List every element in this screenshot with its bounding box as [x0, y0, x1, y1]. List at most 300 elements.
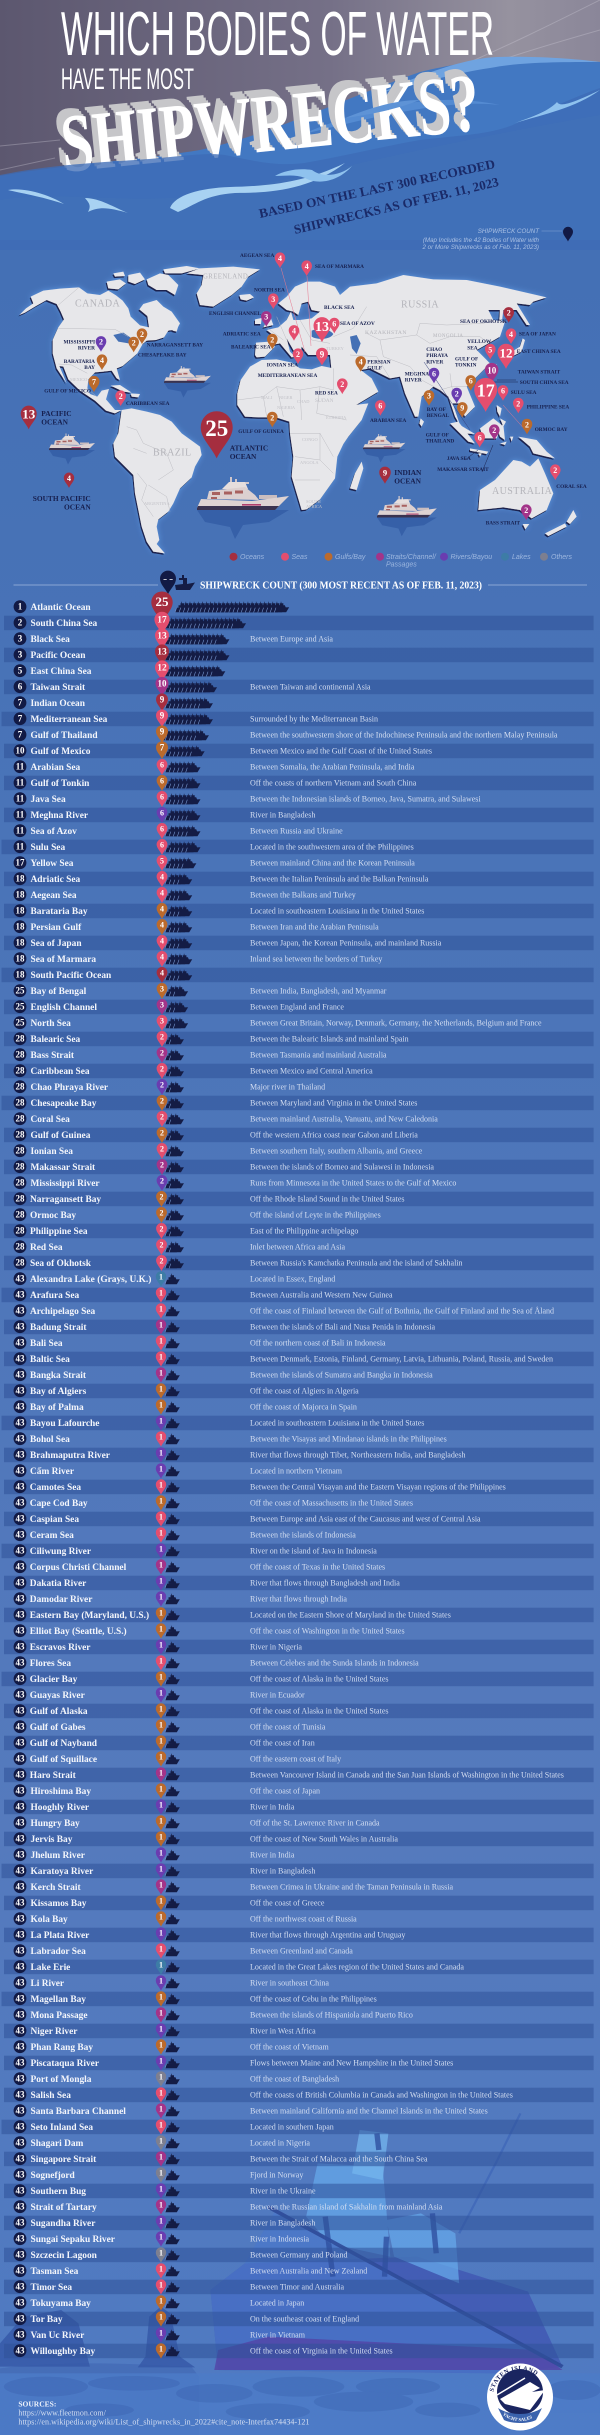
row 68: Glacier Bay: 1 [159, 1673, 163, 1682]
row 86: Lake Erie: 43 [16, 1962, 25, 1972]
country labels: CANADA [75, 298, 121, 310]
row 89: Mona Passage: Mona Passage [30, 2011, 88, 2021]
map labels: NARRAGANSETT BAY [147, 343, 203, 349]
row 9: Gulf of Thailand: Gulf of Thailand [30, 731, 98, 741]
map pins: 9 [460, 404, 464, 413]
map labels: BALEARIC SEA [231, 344, 271, 350]
row 25: Bay of Bengal: 25 [16, 986, 25, 996]
row 102: Sugandha River: Sugandha River [30, 2219, 95, 2229]
row 82: Kissamos Bay: Off the coast of Greece [250, 1898, 325, 1907]
country labels: KAZAKHSTAN [365, 330, 407, 336]
map pins: 4 [278, 254, 282, 263]
row 59: Ceram Sea: Ceram Sea [30, 1531, 74, 1541]
row 54: Brahmaputra River: 1 [159, 1449, 163, 1458]
row 20: Barataria Bay [4, 903, 594, 919]
map pins: 9 [383, 468, 387, 478]
row 81: Kerch Strait: Kerch Strait [30, 1883, 81, 1893]
row 63: Damodar River: Damodar River [30, 1595, 92, 1605]
row 33: Coral Sea: 28 [16, 1114, 25, 1124]
row 11: Arabian Sea: 11 [16, 762, 25, 772]
row 23: Sea of Marmara: 4 [160, 953, 164, 962]
row 90: Niger River [4, 2023, 594, 2039]
front wave with foam [0, 88, 600, 250]
map labels: CARIBBEAN SEA [126, 401, 170, 407]
row 26: English Channel: English Channel [30, 1003, 97, 1013]
row 7: Indian Ocean [14, 693, 213, 711]
row 17: Yellow Sea: 17 [16, 858, 25, 868]
row 109: Van Uc River: River in Vietnam [250, 2330, 306, 2339]
map labels: RED SEA [315, 390, 338, 396]
row 97: Shagari Dam: 43 [16, 2138, 25, 2148]
row 7: Indian Ocean: Indian Ocean [30, 699, 86, 709]
row 65: Elliot Bay: 43 [16, 1626, 25, 1636]
row 30: Caribbean Sea [4, 1063, 594, 1079]
row 62: Dakatia River [4, 1575, 594, 1591]
row 57: Cape Cod Bay: 1 [159, 1497, 163, 1506]
row 14: Meghna River: River in Bangladesh [250, 810, 315, 819]
row 22: Sea of Japan: 4 [160, 937, 164, 946]
map inland water and borders [58, 287, 493, 517]
map labels: AEGEAN SEA [240, 253, 274, 259]
row 15: Sea of Azov [14, 823, 343, 839]
row 82: Kissamos Bay: Kissamos Bay [30, 1899, 87, 1909]
row 32: Chesapeake Bay: Chesapeake Bay [30, 1099, 97, 1109]
row 56: Camotes Sea [4, 1479, 594, 1495]
row 29: Bass Strait: Between Tasmania and mainland Australia [250, 1050, 387, 1059]
row 30: Caribbean Sea: 28 [16, 1066, 25, 1076]
yacht illustrations [49, 366, 437, 539]
row 43: Alexandra Lake: 43 [16, 1274, 25, 1284]
country labels: AFRICA [306, 504, 323, 509]
row 19: Aegean Sea: 4 [160, 889, 164, 898]
row 78: Jervis Bay: Off the coast of New South Wales in Australia [250, 1834, 398, 1843]
row 37: Mississippi River: Runs from Minnesota in the United States to the Gulf of Mexico [250, 1178, 456, 1187]
row 82: Kissamos Bay: 43 [16, 1898, 25, 1908]
map pins: 2 [516, 399, 520, 408]
map pins: 6 [332, 319, 336, 328]
row 75: Hiroshima Bay: 43 [16, 1786, 25, 1796]
map labels: ORMOC BAY [535, 427, 568, 433]
map pins: 5 [488, 345, 492, 354]
country labels: TURKEY [326, 346, 345, 351]
map pins: 9 [320, 350, 325, 360]
row 5: East China Sea [14, 660, 225, 681]
row 8: Mediterranean Sea: 9 [160, 711, 165, 721]
row 36: Makassar Strait: Makassar Strait [30, 1163, 96, 1173]
row 91: Phan Rang Bay: Off the coast of Vietnam [250, 2042, 330, 2051]
row 4: Pacific Ocean [4, 644, 594, 665]
row 87: Li River: River in southeast China [250, 1978, 329, 1987]
row 107: Tokuyama Bay: Located in Japan [250, 2298, 304, 2307]
row 51: Bay of Palma: Bay of Palma [30, 1403, 84, 1413]
map labels: SEA [467, 345, 478, 351]
row 29: Bass Strait [14, 1047, 387, 1063]
row 27: North Sea [14, 1015, 542, 1031]
row 8: Mediterranean Sea: 7 [18, 714, 23, 724]
row 51: Bay of Palma: Off the coast of Majorca in Spain [250, 1402, 357, 1411]
row 42: Sea of Okhotsk: Between Russia's Kamchatka Peninsula and the island of Sakhalin [250, 1258, 463, 1267]
row 85: Labrador Sea: 1 [159, 1945, 163, 1954]
country labels: MONGOLIA [433, 334, 463, 339]
row 19: Aegean Sea: Between the Balkans and Turkey [250, 890, 356, 899]
row 96: Seto Inland Sea [2, 2119, 594, 2135]
row 105: Tasman Sea [14, 2263, 367, 2279]
row 42: Sea of Okhotsk: 2 [160, 1257, 164, 1266]
row 62: Dakatia River: 43 [16, 1578, 25, 1588]
row 61: Corpus Christi Channel: 43 [16, 1562, 25, 1572]
row 59: Ceram Sea: 43 [16, 1530, 25, 1540]
row 54: Brahmaputra River [4, 1447, 594, 1463]
row 60: Ciliwung River: 1 [159, 1545, 163, 1554]
map connector lines [281, 268, 527, 472]
row 87: Li River: 43 [16, 1978, 25, 1988]
row 14: Meghna River [4, 807, 594, 823]
row 1: Atlantic Ocean: Atlantic Ocean [30, 603, 91, 613]
map pins: 4 [509, 330, 513, 339]
row 46: Badung Strait [4, 1319, 594, 1335]
legend: Others [551, 554, 573, 561]
row 18: Adriatic Sea: 4 [160, 873, 164, 882]
row 10: Gulf of Mexico [4, 741, 594, 759]
row 47: Bali Sea: 1 [159, 1337, 163, 1346]
country labels: ANGOLA [300, 460, 319, 465]
row 70: Gulf of Alaska: Off the coast of Alaska in the United States [250, 1706, 388, 1715]
map pins [21, 252, 561, 520]
row 82: Kissamos Bay: 1 [159, 1897, 163, 1906]
map labels: GULF OF GUINEA [238, 429, 284, 435]
row 105: Tasman Sea: 43 [16, 2266, 25, 2276]
row 34: Gulf of Guinea: 28 [16, 1130, 25, 1140]
row 89: Mona Passage: 43 [16, 2010, 25, 2020]
row 68: Glacier Bay [2, 1671, 594, 1687]
row 96: Seto Inland Sea: Seto Inland Sea [30, 2123, 93, 2133]
row 94: Salish Sea: 1 [159, 2089, 163, 2098]
row 98: Singapore Strait: 43 [16, 2154, 25, 2164]
row 16: Sulu Sea: Located in the southwestern area of the Philippines [250, 842, 414, 851]
row 5: East China Sea: 12 [157, 664, 167, 674]
row 83: Kola Bay: 1 [159, 1913, 163, 1922]
row 96: Seto Inland Sea: Located in southern Japan [250, 2122, 334, 2131]
row 18: Adriatic Sea: 18 [16, 874, 25, 884]
row 39: Ormoc Bay: Ormoc Bay [30, 1211, 76, 1221]
row 12: Gulf of Tonkin: Off the coasts of northern Vietnam and South China [250, 778, 417, 787]
row 81: Kerch Strait [14, 1879, 453, 1895]
row 110: Willoughby Bay: 43 [16, 2346, 25, 2356]
row 107: Tokuyama Bay: 43 [16, 2298, 25, 2308]
row 11: Arabian Sea: Between Somalia, the Arabian Peninsula, and India [250, 762, 415, 771]
row 61: Corpus Christi Channel: Off the coast of Texas in the United States [250, 1562, 385, 1571]
legend: Straits/Channel/ [386, 554, 437, 561]
row 60: Ciliwung River: 43 [16, 1546, 25, 1556]
row 68: Glacier Bay: Glacier Bay [30, 1675, 78, 1685]
row 78: Jervis Bay: 1 [159, 1833, 163, 1842]
row 85: Labrador Sea: Between Greenland and Canada [250, 1946, 353, 1955]
row 18: Adriatic Sea: Adriatic Sea [30, 875, 81, 885]
row 77: Hungry Bay: 43 [16, 1818, 25, 1828]
legend [230, 553, 573, 568]
row 73: Gulf of Squillace [14, 1751, 341, 1767]
row 39: Ormoc Bay: 28 [16, 1210, 25, 1220]
sky background [0, 0, 600, 180]
map labels: CHAO [426, 347, 442, 353]
row 33: Coral Sea [14, 1111, 438, 1127]
row 60: Ciliwung River: Ciliwung River [30, 1547, 91, 1557]
row 56: Camotes Sea: Camotes Sea [30, 1483, 81, 1493]
row 50: Bay of Algiers: Bay of Algiers [30, 1387, 87, 1397]
row 4: Pacific Ocean: Pacific Ocean [30, 651, 86, 661]
row 57: Cape Cod Bay: 43 [16, 1498, 25, 1508]
row 53: Bohol Sea [14, 1431, 447, 1447]
row 85: Labrador Sea: 43 [16, 1946, 25, 1956]
map pins: 2 [340, 380, 344, 389]
row 91: Phan Rang Bay: Phan Rang Bay [30, 2043, 93, 2053]
country labels: AUSTRALIA [492, 486, 553, 497]
row 47: Bali Sea [14, 1335, 386, 1351]
map labels: RIVER [78, 345, 95, 351]
row 26: English Channel [4, 999, 594, 1015]
row 86: Lake Erie: 1 [159, 1961, 163, 1970]
row 101: Strait of Tartary: Between the Russian island of Sakhalin from mainland Asia [250, 2202, 443, 2211]
row 63: Damodar River: 1 [159, 1593, 163, 1602]
row 78: Jervis Bay [4, 1831, 594, 1847]
row 45: Archipelago Sea: 43 [16, 1306, 25, 1316]
row 78: Jervis Bay: Jervis Bay [30, 1835, 73, 1845]
row 77: Hungry Bay [14, 1815, 380, 1831]
row 43: Alexandra Lake: 1 [159, 1273, 163, 1282]
row 54: Brahmaputra River: Brahmaputra River [30, 1451, 110, 1461]
row 40: Philippine Sea: 28 [16, 1226, 25, 1236]
row 14: Meghna River: 11 [16, 810, 25, 820]
row 74: Haro Strait: Haro Strait [30, 1771, 77, 1781]
row 69: Guayas River: Guayas River [30, 1691, 85, 1701]
row 95: Santa Barbara Channel [14, 2103, 488, 2119]
map labels: CHESAPEAKE BAY [138, 352, 187, 358]
row 36: Makassar Strait: 28 [16, 1162, 25, 1172]
row 66: Escravos River [4, 1639, 594, 1655]
title [61, 0, 494, 96]
row 12: Gulf of Tonkin: 6 [160, 777, 164, 786]
row 49: Bangka Strait: Bangka Strait [30, 1371, 87, 1381]
row 24: South Pacific Ocean: 18 [16, 970, 25, 980]
row 3: Black Sea: Black Sea [30, 635, 70, 645]
row 10: Gulf of Mexico: Gulf of Mexico [30, 747, 91, 757]
row 17: Yellow Sea: Between mainland China and the Korean Peninsula [250, 858, 415, 867]
map pins: 2 [270, 413, 274, 422]
row 52: Bayou Lafourche: 43 [16, 1418, 25, 1428]
row 90: Niger River: 1 [159, 2025, 163, 2034]
row 35: Ionian Sea: Between southern Italy, southern Albania, and Greece [250, 1146, 423, 1155]
row 99: Sognefjord: Fjord in Norway [250, 2170, 303, 2179]
row 95: Santa Barbara Channel: 43 [16, 2106, 25, 2116]
row 91: Phan Rang Bay: 1 [159, 2041, 163, 2050]
country labels: CONGO [302, 437, 318, 442]
row 14: Meghna River: 6 [160, 809, 164, 818]
row 20: Barataria Bay: Located in southeastern Louisiana in the United States [250, 906, 424, 915]
map pins: 2 [99, 338, 103, 347]
map labels: TONKIN [455, 362, 477, 368]
row 88: Magellan Bay [2, 1991, 594, 2007]
row 13: Java Sea: 11 [16, 794, 25, 804]
row 23: Sea of Marmara: Sea of Marmara [30, 955, 96, 965]
map labels: OCEAN [394, 476, 422, 486]
row 73: Gulf of Squillace: Gulf of Squillace [30, 1755, 97, 1765]
map pins: 12 [500, 346, 512, 360]
row 94: Salish Sea [4, 2087, 594, 2103]
row 34: Gulf of Guinea: 2 [160, 1129, 164, 1138]
row 58: Caspian Sea [4, 1511, 594, 1527]
map labels: RIVER [405, 378, 422, 384]
row 33: Coral Sea: 2 [160, 1113, 164, 1122]
row 108: Tor Bay: 43 [16, 2314, 25, 2324]
row 48: Baltic Sea: Baltic Sea [30, 1355, 70, 1365]
row 15: Sea of Azov: Between Russia and Ukraine [250, 826, 343, 835]
row 22: Sea of Japan: 18 [16, 938, 25, 948]
row 83: Kola Bay: 43 [16, 1914, 25, 1924]
row 100: Southern Bug: 1 [159, 2185, 163, 2194]
row 18: Adriatic Sea [4, 871, 594, 887]
row 2: South China Sea: South China Sea [30, 619, 98, 629]
row 46: Badung Strait: Between the islands of Bali and Nusa Penida in Indonesia [250, 1322, 436, 1331]
row 4: Pacific Ocean: 3 [18, 650, 23, 660]
row 77: Hungry Bay: Off of the St. Lawrence River in Canada [250, 1818, 380, 1827]
row 62: Dakatia River: Dakatia River [30, 1579, 86, 1589]
row 6: Taiwan Strait: Taiwan Strait [30, 683, 86, 693]
row 56: Camotes Sea: Between the Central Visayan and the Eastern Visayan regions of the Philippines [250, 1482, 506, 1491]
row 101: Strait of Tartary: 43 [16, 2202, 25, 2212]
row 49: Bangka Strait: 43 [16, 1370, 25, 1380]
map labels: ATLANTIC [230, 444, 268, 452]
row 55: Cấm River [14, 1463, 343, 1479]
row 69: Guayas River: 1 [159, 1689, 163, 1698]
row 28: Balearic Sea: 2 [160, 1033, 164, 1042]
row 61: Corpus Christi Channel: Corpus Christi Channel [30, 1563, 127, 1573]
row 95: Santa Barbara Channel: Santa Barbara Channel [30, 2107, 126, 2117]
row 42: Sea of Okhotsk: 28 [16, 1258, 25, 1268]
row 52: Bayou Lafourche: 1 [159, 1417, 163, 1426]
map labels: MEGHNA [405, 371, 429, 377]
row 89: Mona Passage: 1 [159, 2009, 163, 2018]
row 87: Li River [14, 1975, 329, 1991]
row 46: Badung Strait: 43 [16, 1322, 25, 1332]
row 34: Gulf of Guinea: Gulf of Guinea [30, 1131, 91, 1141]
row 76: Hooghly River: 43 [16, 1802, 25, 1812]
row 105: Tasman Sea: Between Australia and New Zealand [250, 2266, 367, 2275]
country labels: ETHIOPIA [326, 415, 347, 420]
row 98: Singapore Strait: 1 [159, 2153, 163, 2162]
row 38: Narragansett Bay: 28 [16, 1194, 25, 1204]
row 99: Sognefjord: 43 [16, 2170, 25, 2180]
row 90: Niger River: River in West Africa [250, 2026, 316, 2035]
row 9: Gulf of Thailand [14, 725, 558, 743]
row 12: Gulf of Tonkin: Gulf of Tonkin [30, 779, 90, 789]
row 52: Bayou Lafourche [2, 1415, 594, 1431]
row 10: Gulf of Mexico: Between Mexico and the Gulf Coast of the United States [250, 746, 432, 755]
row 30: Caribbean Sea: Caribbean Sea [30, 1067, 90, 1077]
map note: shipwreck count key [422, 227, 573, 251]
row 58: Caspian Sea: Between Europe and Asia east of the Caucasus and west of Central Asia [250, 1514, 481, 1523]
row 1: Atlantic Ocean [14, 591, 289, 623]
row 46: Badung Strait: 1 [159, 1321, 163, 1330]
row 103: Sungai Sepaku River: 1 [159, 2233, 163, 2242]
row 17: Yellow Sea [14, 855, 415, 871]
row 108: Tor Bay [4, 2311, 594, 2327]
row 110: Willoughby Bay: Off the coast of Virginia in the United States [250, 2346, 393, 2355]
row 31: Chao Phraya River: Major river in Thailand [250, 1082, 325, 1091]
row 58: Caspian Sea: 1 [159, 1513, 163, 1522]
row 81: Kerch Strait: 43 [16, 1882, 25, 1892]
row 106: Timor Sea: 43 [16, 2282, 25, 2292]
row 56: Camotes Sea: 43 [16, 1482, 25, 1492]
row 16: Sulu Sea: Sulu Sea [30, 843, 65, 853]
row 74: Haro Strait: 1 [159, 1769, 163, 1778]
map labels: BENGAL [427, 413, 450, 419]
row 62: Dakatia River: 1 [159, 1577, 163, 1586]
row 86: Lake Erie: Lake Erie [30, 1963, 70, 1973]
map labels: EAST CHINA SEA [517, 349, 561, 355]
row 13: Java Sea: Java Sea [30, 795, 66, 805]
row 20: Barataria Bay: 18 [16, 906, 25, 916]
row 60: Ciliwung River [2, 1543, 594, 1559]
subtitle: BASED ON THE LAST 300 RECORDED [258, 156, 496, 221]
map pins: 2 [507, 309, 511, 318]
row 26: English Channel: 3 [160, 1001, 164, 1010]
row 17: Yellow Sea: 5 [160, 857, 164, 866]
back wave [0, 57, 600, 240]
row 50: Bay of Algiers: Off the coast of Algiers in Algeria [250, 1386, 359, 1395]
row 95: Santa Barbara Channel: Between mainland California and the Channel Islands in the United States [250, 2106, 488, 2115]
row 36: Makassar Strait: Between the islands of Borneo and Sulawesi in Indonesia [250, 1162, 434, 1171]
row 65: Elliot Bay: 1 [159, 1625, 163, 1634]
map pins: 3 [427, 392, 431, 401]
row 45: Archipelago Sea: 1 [159, 1305, 163, 1314]
row 37: Mississippi River: 2 [160, 1177, 164, 1186]
map labels: SEA OF JAPAN [519, 331, 556, 337]
row 76: Hooghly River [4, 1799, 594, 1815]
row 64: Eastern Bay: Located on the Eastern Shore of Maryland in the United States [250, 1610, 451, 1619]
row 2: South China Sea: 2 [18, 618, 23, 628]
row 75: Hiroshima Bay: Hiroshima Bay [30, 1787, 91, 1797]
row 52: Bayou Lafourche: Located in southeastern Louisiana in the United States [250, 1418, 424, 1427]
row 70: Gulf of Alaska: 1 [159, 1705, 163, 1714]
row 94: Salish Sea: 43 [16, 2090, 25, 2100]
row 25: Bay of Bengal: 3 [160, 985, 164, 994]
map pins: 3 [271, 295, 275, 304]
row 35: Ionian Sea: Ionian Sea [30, 1147, 73, 1157]
row 109: Van Uc River: Van Uc River [30, 2331, 84, 2341]
legend: Lakes [512, 554, 531, 561]
row 76: Hooghly River: 1 [159, 1801, 163, 1810]
row 54: Brahmaputra River: 43 [16, 1450, 25, 1460]
row 83: Kola Bay: Off the northwest coast of Russia [250, 1914, 357, 1923]
row 105: Tasman Sea: 1 [159, 2265, 163, 2274]
row 72: Gulf of Nayband: 43 [16, 1738, 25, 1748]
row 71: Gulf of Gabes [14, 1719, 326, 1735]
country labels: MALI [261, 395, 273, 400]
row 61: Corpus Christi Channel: 1 [159, 1561, 163, 1570]
row 55: Cấm River: Located in northern Vietnam [250, 1466, 343, 1475]
map labels: JAVA SEA [447, 456, 471, 462]
row 67: Flores Sea [14, 1655, 419, 1671]
row 37: Mississippi River: 28 [16, 1178, 25, 1188]
row 79: Jhelum River: River in India [250, 1850, 295, 1859]
map pins: 13 [22, 406, 36, 422]
row 6: Taiwan Strait: 10 [158, 679, 167, 689]
row 9: Gulf of Thailand: Between the southwestern shore of the Indochinese Peninsula and the northern Malay Peninsula [250, 730, 558, 739]
map labels: GULF OF [426, 433, 449, 439]
row 39: Ormoc Bay [14, 1207, 381, 1223]
row 38: Narragansett Bay: 2 [160, 1193, 164, 1202]
row 18: Adriatic Sea: Between the Italian Peninsula and the Balkan Peninsula [250, 874, 429, 883]
